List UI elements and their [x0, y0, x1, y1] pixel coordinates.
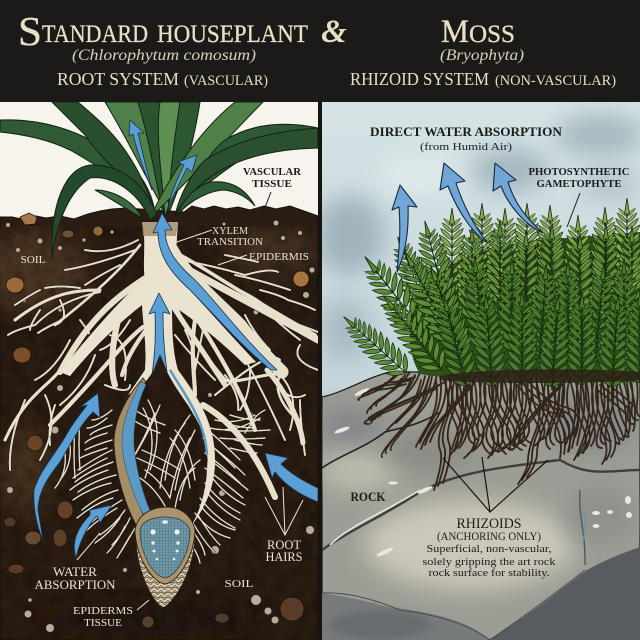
arrow: soil left — [34, 393, 100, 540]
arrow: stem to right root — [153, 213, 277, 370]
meristem dome — [135, 507, 195, 584]
title: Moss — [441, 14, 515, 50]
arrow: central taproot — [149, 293, 170, 375]
blue water arrows — [34, 120, 318, 558]
soil — [0, 206, 318, 640]
callout: rhizoids: (ANCHORING ONLY) — [437, 531, 541, 543]
fine lateral roots — [8, 240, 318, 470]
label: epidermis: EPIDERMIS — [249, 251, 309, 263]
left spreading fronds — [343, 250, 472, 376]
title: Moss: OSS — [469, 21, 515, 48]
title: Moss: M — [441, 14, 469, 50]
header band — [0, 0, 640, 102]
humidity arrows — [392, 163, 543, 272]
rhizoid pointer lines — [443, 457, 548, 512]
label: epidermis tissue — [73, 600, 149, 629]
arrow: right — [493, 163, 543, 233]
soil pebbles — [4, 213, 315, 632]
arrow: soil lower — [74, 505, 112, 558]
heading: rhizoid system: (NON-VASCULAR) — [495, 73, 616, 89]
blue line in right root — [170, 370, 207, 455]
label: photosynthetic gametophyte — [528, 167, 630, 227]
label: vascular tissue: VASCULAR — [243, 167, 301, 178]
label: rock: ROCK — [350, 490, 386, 504]
outer tissue band — [114, 378, 147, 527]
label: soil upper: SOIL — [20, 255, 46, 266]
root cross-section — [114, 370, 207, 608]
label: photosynthetic gametophyte: GAMETOPHYTE — [536, 179, 622, 190]
heading: root system — [57, 69, 268, 89]
dark moss base — [440, 369, 640, 383]
label: direct water absorption: DIRECT WATER ABSORPTION — [370, 124, 563, 139]
humid sky — [315, 102, 640, 402]
subtitle: Bryophyta: (Bryophyta) — [440, 47, 524, 64]
secondary roots — [60, 275, 150, 372]
label: water absorption: ABSORPTION — [34, 577, 116, 592]
label: vascular tissue: TISSUE — [252, 179, 292, 190]
plant roots — [5, 222, 318, 563]
moss cushion — [334, 198, 640, 393]
label: direct water absorption — [370, 128, 562, 152]
heading: root system: ROOT SYSTEM — [57, 69, 179, 89]
label: root hairs — [265, 487, 303, 564]
label: root hairs: ROOT — [267, 537, 301, 552]
arrow: centre — [440, 163, 488, 243]
heading: rhizoid system: RHIZOID SYSTEM — [350, 69, 489, 89]
front fronds — [429, 255, 640, 393]
label: epidermis tissue: TISSUE — [84, 617, 122, 629]
back fronds — [437, 198, 640, 311]
title: Standard houseplant — [18, 8, 308, 54]
ampersand: & — [321, 14, 347, 50]
label: root hairs: HAIRS — [266, 549, 302, 564]
label: water absorption: WATER — [53, 564, 97, 579]
arrow: left — [392, 185, 417, 272]
vascular core — [122, 381, 153, 522]
label: soil lower: SOIL — [224, 579, 254, 590]
arrow: into right leaf — [168, 155, 197, 207]
heading: rhizoid system — [350, 69, 616, 89]
label: water absorption — [34, 533, 116, 592]
label: photosynthetic gametophyte: PHOTOSYNTHETIC — [528, 167, 630, 178]
callout: rhizoids: RHIZOIDS — [456, 516, 522, 532]
callout: rhizoids: Superficial, non-vascular, — [426, 543, 552, 555]
label: epidermis tissue: EPIDERMS — [73, 605, 133, 617]
rhizoids — [358, 372, 640, 490]
root hairs — [60, 400, 270, 555]
arrow: soil right — [265, 453, 318, 502]
callout: rhizoids: rock surface for stability. — [428, 567, 550, 579]
callout: rhizoids: solely gripping the art rock — [422, 556, 556, 568]
main taproot — [60, 222, 256, 528]
panel: moss rhizoid system — [315, 102, 640, 640]
label: xylem transition — [168, 225, 263, 248]
title: Standard houseplant: TANDARD — [42, 21, 148, 48]
arrow: into leaf — [129, 120, 152, 190]
stem base texture — [142, 222, 178, 236]
panel: houseplant root system — [0, 102, 318, 640]
cell dots — [150, 520, 180, 560]
callout: rhizoids — [422, 516, 556, 579]
title: Standard houseplant: S — [18, 8, 42, 54]
title: Standard houseplant: HOUSEPLANT — [157, 21, 308, 48]
root cap — [136, 535, 195, 608]
mid fronds — [384, 217, 640, 331]
label: epidermis — [218, 251, 309, 265]
heading: root system: (VASCULAR) — [184, 73, 268, 89]
label: xylem transition: XYLEM — [212, 225, 248, 237]
meristem core — [140, 517, 190, 578]
label: vascular tissue — [243, 167, 301, 228]
subtitle: Chlorophytum comosum: (Chlorophytum comosum) — [72, 47, 256, 64]
label: direct water absorption: (from Humid Air) — [420, 141, 512, 153]
label: xylem transition: TRANSITION — [197, 236, 263, 248]
panel divider — [318, 102, 322, 640]
rock mass — [315, 372, 640, 640]
plant leaves — [0, 102, 318, 258]
